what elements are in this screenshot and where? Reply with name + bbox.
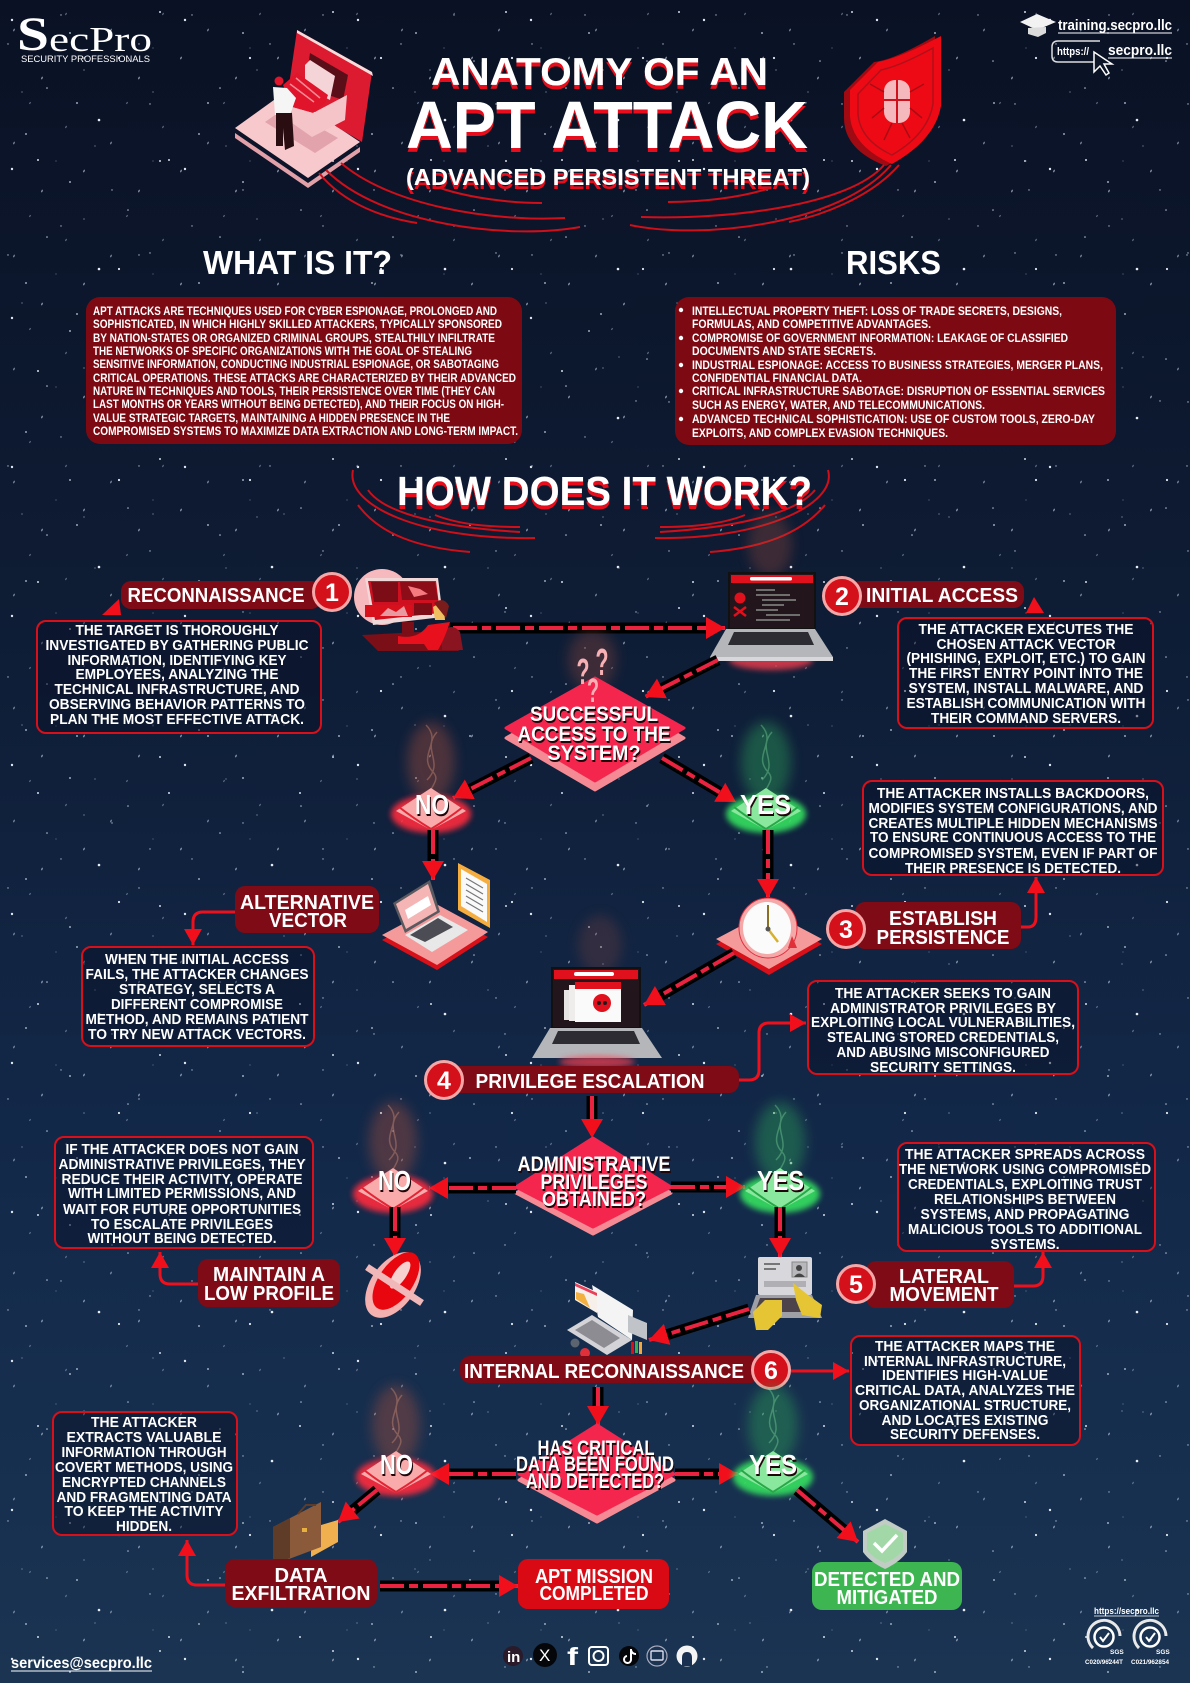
panel: what is it: BY NATION-STATES OR ORGANIZED CRIMINAL GROUPS, STEALTHILY INFILTRATE [93,332,495,345]
panel: risks: SUCH AS ENERGY, WATER, AND TELECOMMUNICATIONS. [692,399,985,412]
result: apt mission completed: APT MISSION [535,1566,653,1588]
text box: alternative vector description: FAILS, THE ATTACKER CHANGES [86,966,308,983]
links: training and website [1020,14,1172,75]
text box: lateral movement description: MALICIOUS TOOLS TO ADDITIONAL [908,1221,1142,1238]
step 4: privilege escalation label: PRIVILEGE ESCALATION [476,1071,704,1093]
panel: risks: INDUSTRIAL ESPIONAGE: ACCESS TO BUSINESS STRATEGIES, MERGER PLANS, [692,359,1103,372]
certification badges: SGS [1156,1649,1170,1656]
icon: clock on platform [716,898,822,975]
step 5: lateral movement label: MOVEMENT [890,1284,998,1306]
text box: alternative vector description [82,947,314,1046]
text box: internal reconnaissance description: CRITICAL DATA, ANALYZES THE [855,1382,1075,1399]
text box: internal reconnaissance description: THE ATTACKER MAPS THE [875,1338,1055,1355]
arrow: admin decision to no [429,1182,516,1194]
connector: low profile to description [160,1252,198,1284]
text box: persistence description: CREATES MULTIPLE HIDDEN MECHANISMS [868,815,1158,832]
text box: lateral movement description: CREDENTIALS, EXPLOITING TRUST [908,1176,1142,1193]
text box: maintain low profile description: TO ESCALATE PRIVILEGES [91,1216,273,1233]
text box: persistence description [863,781,1163,877]
panel: what is it: THE NETWORKS OF SPECIFIC ORGANIZATIONS WITH THE GOAL OF STEALING [93,345,472,358]
title: ANATOMY OF AN [431,51,768,94]
connector: alternative vector to description [193,912,235,945]
text box: initial access description: SYSTEM, INSTALL MALWARE, AND [908,680,1144,697]
title: APT ATTACK [406,88,808,163]
text box: persistence description: TO ENSURE CONTINUOUS ACCESS TO THE [870,829,1156,846]
arrow: yes to detected [797,1490,858,1542]
panel: risks: COMPROMISE OF GOVERNMENT INFORMATION: LEAKAGE OF CLASSIFIED [692,332,1068,345]
arrowhead: initial access to description [1026,597,1044,613]
decision: administrative privileges: OBTAINED? [542,1188,646,1211]
text box: persistence description: COMPROMISED SYSTEM, EVEN IF PART OF [868,845,1158,862]
icon: crossed-out eye [354,1242,432,1328]
text box: lateral movement description: THE NETWORK USING COMPROMISED [899,1161,1151,1178]
text box: lateral movement description: RELATIONSHIPS BETWEEN [934,1191,1116,1208]
result: detected and mitigated: MITIGATED [836,1587,938,1609]
step 3: establish persistence label: 3 [839,916,853,944]
text box: reconnaissance description: TECHNICAL INFRASTRUCTURE, AND [54,681,300,698]
text box: reconnaissance description: OBSERVING BEHAVIOR PATTERNS TO [49,696,305,713]
decision: successful access: SYSTEM? [548,742,640,765]
icon: red shield with bug [844,36,941,166]
panel: risks: CRITICAL INFRASTRUCTURE SABOTAGE: DISRUPTION OF ESSENTIAL SERVICES [692,385,1105,398]
panel: risks [675,297,1116,445]
text box: internal reconnaissance description: IDENTIFIES HIGH-VALUE [882,1367,1048,1384]
outcome: yes: YES [757,1165,804,1196]
text box: data exfiltration description: EXTRACTS VALUABLE [66,1429,222,1446]
text box: reconnaissance description: INFORMATION, IDENTIFYING KEY [68,652,286,669]
panel: risks: EXPLOITS, AND COMPLEX EVASION TECHNIQUES. [692,427,948,440]
arrow: data decision to no [430,1468,516,1480]
text box: initial access description: CHOSEN ATTACK VECTOR [936,636,1116,653]
arrow: exfiltration to mission completed [380,1580,518,1592]
text box: internal reconnaissance description: AND LOCATES EXISTING [882,1412,1048,1429]
decision: successful access: ? [576,651,590,692]
outcome: no: NO [415,789,449,820]
outcome: no: NO [380,1449,413,1480]
links: training and website: training.secpro.llc [1058,17,1172,34]
text box: data exfiltration description: HIDDEN. [116,1518,172,1535]
text box: maintain low profile description: IF THE ATTACKER DOES NOT GAIN [66,1141,298,1158]
panel: what is it: VALUE STRATEGIC TARGETS, MAINTAINING A HIDDEN PRESENCE IN THE [93,412,450,425]
panel: what is it: CRITICAL OPERATIONS. THESE ATTACKS ARE CHARACTERIZED BY THEIR ADVANCED [93,372,516,385]
panel: risks: INTELLECTUAL PROPERTY THEFT: LOSS OF TRADE SECRETS, DESIGNS, [692,305,1062,318]
text box: initial access description [898,618,1153,728]
icon: green check shield [863,1519,907,1569]
outcome: no [353,1102,433,1213]
text box: initial access description: THE ATTACKER EXECUTES THE [918,621,1134,638]
step 3: establish persistence label: PERSISTENCE [876,927,1010,949]
text box: privilege escalation description: AND ABUSING MISCONFIGURED [836,1044,1050,1061]
text box: internal reconnaissance description [851,1336,1080,1445]
icon: laptop with file drawer [235,30,373,188]
decision: critical data found: HAS CRITICAL [538,1437,655,1460]
heading: how does it work: HOW DOES IT WORK? [397,468,812,514]
step 3: establish persistence label [828,902,1021,949]
arrow: persistence to privilege escalation [644,953,734,1005]
decision: successful access: SUCCESSFUL [530,703,658,726]
text box: alternative vector description: STRATEGY, SELECTS A [119,981,275,998]
arrow: initial access to decision [645,660,718,697]
social icons: X [539,1646,550,1665]
contact email: services@secpro.llc [11,1655,152,1672]
text box: internal reconnaissance description: INTERNAL INFRASTRUCTURE, [864,1353,1066,1370]
title: (ADVANCED PERSISTENT THREAT) [406,164,810,190]
text box: persistence description: MODIFIES SYSTEM CONFIGURATIONS, AND [868,800,1158,817]
text box: alternative vector description: WHEN THE INITIAL ACCESS [105,951,289,968]
step 5: lateral movement label: 5 [849,1271,863,1299]
links: training and website: https:// [1057,46,1089,58]
text box: data exfiltration description: COVERT METHODS, USING [55,1459,233,1476]
text box: data exfiltration description: THE ATTACKER [91,1414,197,1431]
panel: risks: DOCUMENTS AND STATE SECRETS. [692,345,876,358]
step 5: lateral movement label [838,1261,1014,1308]
arrow: yes to persistence [762,830,774,898]
text box: data exfiltration description [53,1412,237,1535]
step 2: initial access label [824,578,1024,614]
text box: reconnaissance description [37,621,321,733]
text box: reconnaissance description: EMPLOYEES, ANALYZING THE [76,666,278,683]
panel: risks: CONFIDENTIAL FINANCIAL DATA. [692,372,862,385]
arrow: no to data exfiltration [338,1490,377,1522]
panel: what is it: NATURE IN TECHNIQUES AND TOOLS, THEIR PERSISTENCE OVER TIME (THEY CAN [93,385,495,398]
text box: alternative vector description: TO TRY NEW ATTACK VECTORS. [88,1026,306,1043]
text box: lateral movement description: SYSTEMS. [990,1236,1060,1253]
arrow: yes to lateral movement [774,1207,786,1257]
text box: initial access description: THEIR COMMAND SERVERS. [931,710,1121,727]
text box: reconnaissance description: PLAN THE MOST EFFECTIVE ATTACK. [50,711,304,728]
text box: maintain low profile description: WITH LIMITED PERMISSIONS, AND [68,1185,296,1202]
certification badges: C021/962854 [1131,1659,1169,1666]
logo: SecPro: S [17,8,49,61]
panel: what is it: SOPHISTICATED, IN WHICH HIGHLY SKILLED ATTACKERS, TYPICALLY SPONSORED [93,318,502,331]
arrow: no to alternative vector [428,830,438,880]
panel: what is it [86,297,522,444]
step 3: establish persistence label: ESTABLISH [889,908,997,930]
panel: what is it: LAST MONTHS OR YEARS WITHOUT BEING DETECTED), AND THEIR FOCUS ON HIGH- [93,398,504,411]
icon: laptop and clipboard on platform [382,863,490,970]
certification badges [1085,1606,1170,1666]
outcome: yes: YES [740,789,791,820]
outcome: yes [726,722,806,833]
arrow: step 1 to step 2 [450,622,725,634]
text box: maintain low profile description: WITHOUT BEING DETECTED. [88,1230,276,1247]
icon: laptop with skull [710,513,833,670]
social icons: f [567,1643,579,1671]
decision: administrative privileges: PRIVILEGES [540,1171,648,1194]
connector: privilege escalation to description [739,1023,806,1080]
links: training and website: secpro.llc [1108,42,1172,59]
icon: laptop with alert windows [532,915,662,1068]
text box: lateral movement description [898,1143,1155,1253]
text box: privilege escalation description [808,981,1078,1076]
connector: internal reconnaissance to description [791,1370,849,1372]
text box: reconnaissance description: INVESTIGATED BY GATHERING PUBLIC [46,637,309,654]
social icons [503,1643,698,1671]
panel: what is it: SENSITIVE INFORMATION, CONDUCTING INDUSTRIAL ESPIONAGE, OR SABOTAGING [93,358,499,371]
text box: internal reconnaissance description: SECURITY DEFENSES. [890,1426,1040,1443]
text box: initial access description: ESTABLISH COMMUNICATION WITH [906,695,1146,712]
decision: successful access: ACCESS TO THE [518,723,670,746]
text box: alternative vector description: METHOD, AND REMAINS PATIENT [86,1011,308,1028]
connector: exfiltration to description [187,1540,225,1585]
step 1: reconnaissance label: 1 [325,579,339,607]
certification badges: C020/96244T [1085,1659,1123,1666]
text box: reconnaissance description: THE TARGET IS THOROUGHLY [76,622,278,639]
arrow: decision to no [453,758,531,798]
panel: what is it: APT ATTACKS ARE TECHNIQUES USED FOR CYBER ESPIONAGE, PROLONGED AND [93,305,497,318]
text box: data exfiltration description: TO KEEP THE ACTIVITY [64,1503,224,1520]
outcome: yes [733,1385,813,1496]
step: data exfiltration label: DATA [274,1565,328,1587]
step 4: privilege escalation label [426,1062,739,1098]
text box: lateral movement description: SYSTEMS, AND PROPAGATING [920,1206,1130,1223]
step: alternative vector label: ALTERNATIVE [240,892,374,914]
text box: initial access description: THE FIRST ENTRY POINT INTO THE [909,665,1143,682]
text box: persistence description: THE ATTACKER INSTALLS BACKDOORS, [877,785,1149,802]
text box: internal reconnaissance description: ORGANIZATIONAL STRUCTURE, [859,1397,1071,1414]
outcome: no [356,1385,436,1496]
decision: administrative privileges [516,1138,671,1234]
step 6: internal reconnaissance label: 6 [764,1357,778,1385]
social icons: in [507,1649,520,1666]
decision: critical data found [516,1425,674,1522]
text box: privilege escalation description: ADMINISTRATOR PRIVILEGES BY [830,1000,1056,1017]
text box: privilege escalation description: SECURITY SETTINGS. [870,1059,1016,1076]
step: data exfiltration label [225,1559,377,1607]
logo: SecPro: SECURITY PROFESSIONALS [21,54,150,65]
step 2: initial access label: 2 [835,583,849,611]
decision: administrative privileges: ADMINISTRATIVE [518,1153,670,1176]
arrow: data decision to yes [675,1468,738,1480]
decorative header arcs [319,163,899,231]
text box: persistence description: THEIR PRESENCE IS DETECTED. [905,860,1121,877]
text box: maintain low profile description: REDUCE THEIR ACTIVITY, OPERATE [62,1171,302,1188]
arrow: internal reconnaissance to decision [592,1387,604,1425]
arrow: admin decision to yes [671,1182,745,1192]
arrowhead: reconnaissance to description [102,599,121,615]
panel: what is it: COMPROMISED SYSTEMS TO MAXIMIZE DATA EXTRACTION AND LONG-TERM IMPACT. [93,425,518,438]
text box: alternative vector description: DIFFERENT COMPROMISE [111,996,283,1013]
arrow: privilege escalation to decision [586,1096,598,1138]
text box: data exfiltration description: INFORMATION THROUGH [62,1444,226,1461]
icon: laptop with typing hands [748,1257,822,1330]
decorative section arcs [352,470,829,552]
step: maintain a low profile label [198,1259,340,1307]
arrow: no to maintain low profile [390,1207,400,1257]
arrow: lateral movement to internal reconnaissance [649,1309,749,1340]
step 1: reconnaissance label: RECONNAISSANCE [128,585,304,607]
connector: persistence to description [1021,877,1036,927]
connector: lateral movement to description [1014,1252,1043,1286]
outcome: yes [740,1102,820,1213]
text box: privilege escalation description: THE ATTACKER SEEKS TO GAIN [835,985,1051,1002]
heading: risks: RISKS [846,244,941,281]
text box: privilege escalation description: STEALING STORED CREDENTIALS, [827,1029,1059,1046]
outcome: no [391,722,471,833]
decision: successful access: ? [587,672,599,710]
decision: critical data found: DATA BEEN FOUND [516,1453,674,1476]
step 6: internal reconnaissance label [460,1352,790,1388]
result: detected and mitigated: DETECTED AND [814,1569,960,1591]
step: maintain a low profile label: MAINTAIN A [213,1264,325,1286]
result: apt mission completed [518,1559,669,1609]
text box: maintain low profile description [55,1137,313,1248]
text box: data exfiltration description: AND FRAGMENTING DATA [56,1489,232,1506]
decision: successful access [506,630,684,790]
text box: data exfiltration description: ENCRYPTED CHANNELS [62,1474,226,1491]
result: apt mission completed: COMPLETED [540,1583,648,1605]
outcome: no: NO [378,1165,411,1196]
step 6: internal reconnaissance label: INTERNAL RECONNAISSANCE [464,1361,744,1383]
text box: privilege escalation description: EXPLOITING LOCAL VULNERABILITIES, [811,1014,1075,1031]
step: alternative vector label: VECTOR [269,910,348,932]
step 5: lateral movement label: LATERAL [899,1266,989,1288]
step: maintain a low profile label: LOW PROFILE [204,1283,334,1305]
text box: lateral movement description: THE ATTACKER SPREADS ACROSS [905,1146,1145,1163]
step: data exfiltration label: EXFILTRATION [232,1583,370,1605]
icon: briefcase and folder [273,1502,338,1565]
step 4: privilege escalation label: 4 [437,1067,451,1095]
step 1: reconnaissance label [121,574,350,610]
panel: risks: ADVANCED TECHNICAL SOPHISTICATION: USE OF CUSTOM TOOLS, ZERO-DAY [692,413,1095,426]
heading: what is it: WHAT IS IT? [203,244,392,281]
result: detected and mitigated [812,1562,962,1610]
outcome: yes: YES [749,1449,797,1480]
panel: risks: FORMULAS, AND COMPETITIVE ADVANTAGES. [692,318,931,331]
step: alternative vector label [235,886,379,933]
decision: critical data found: AND DETECTED? [526,1470,664,1493]
text box: maintain low profile description: WAIT FOR FUTURE OPPORTUNITIES [63,1201,301,1218]
icon: reconnaissance analyst [354,569,463,651]
icon: laptop with charts [567,1282,647,1358]
decision: successful access: ? [596,642,608,684]
text box: maintain low profile description: ADMINISTRATIVE PRIVILEGES, THEY [58,1156,306,1173]
step 2: initial access label: INITIAL ACCESS [866,585,1018,607]
logo: SecPro: ecPro [49,20,152,59]
arrow: decision to yes [662,758,736,802]
certification badges: https://secpro.llc [1094,1606,1159,1617]
certification badges: SGS [1110,1649,1124,1656]
text box: initial access description: (PHISHING, EXPLOIT, ETC.) TO GAIN [906,650,1146,667]
logo: SecPro [17,8,152,65]
title [406,51,810,190]
